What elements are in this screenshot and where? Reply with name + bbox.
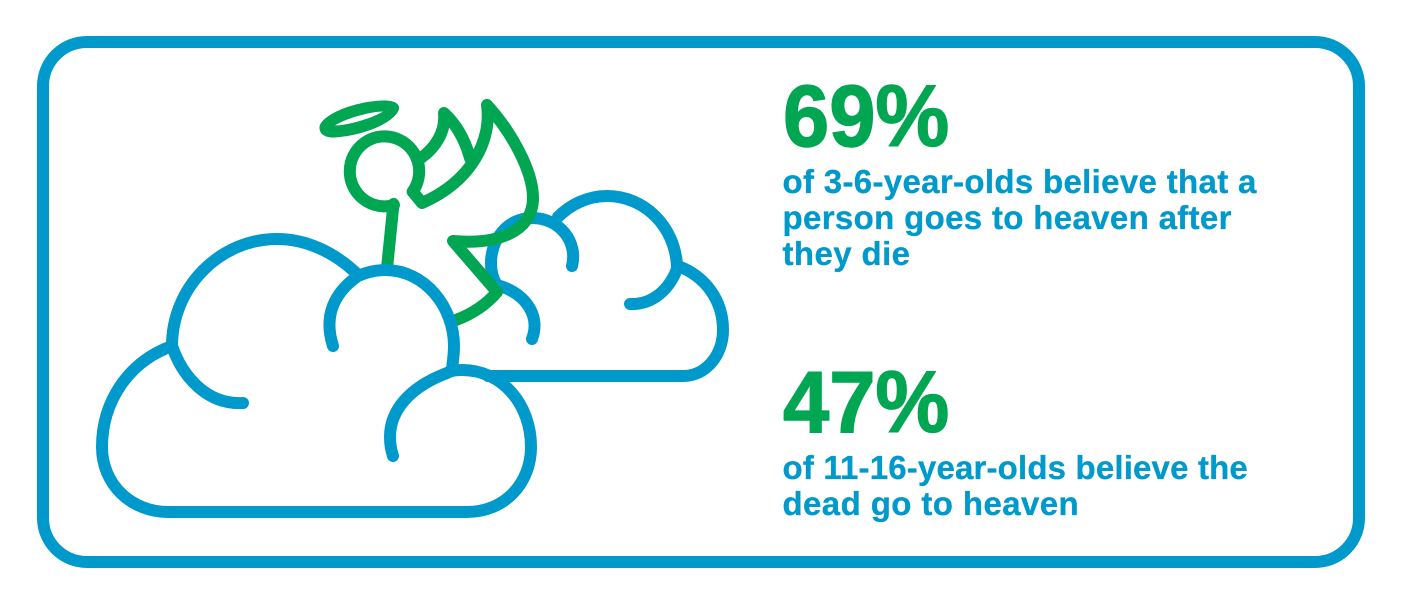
text: 69% description: of 3-6-year-olds believe that a [782,163,1257,200]
text: 69% description: person goes to heaven after [782,199,1232,236]
text: 47% description [782,448,1248,522]
icon: back cloud [488,196,723,376]
icon: angel [319,100,533,320]
text: 47% description: of 11-16-year-olds believe the [782,448,1248,486]
text: 69% description: they die [782,235,910,272]
text: 47% description: dead go to heaven [782,485,1079,522]
icon: front cloud [102,239,531,512]
statistic: 69%: 69% [783,68,949,165]
statistic: 47%: 47% [783,354,949,451]
text: 69% description [782,163,1257,272]
